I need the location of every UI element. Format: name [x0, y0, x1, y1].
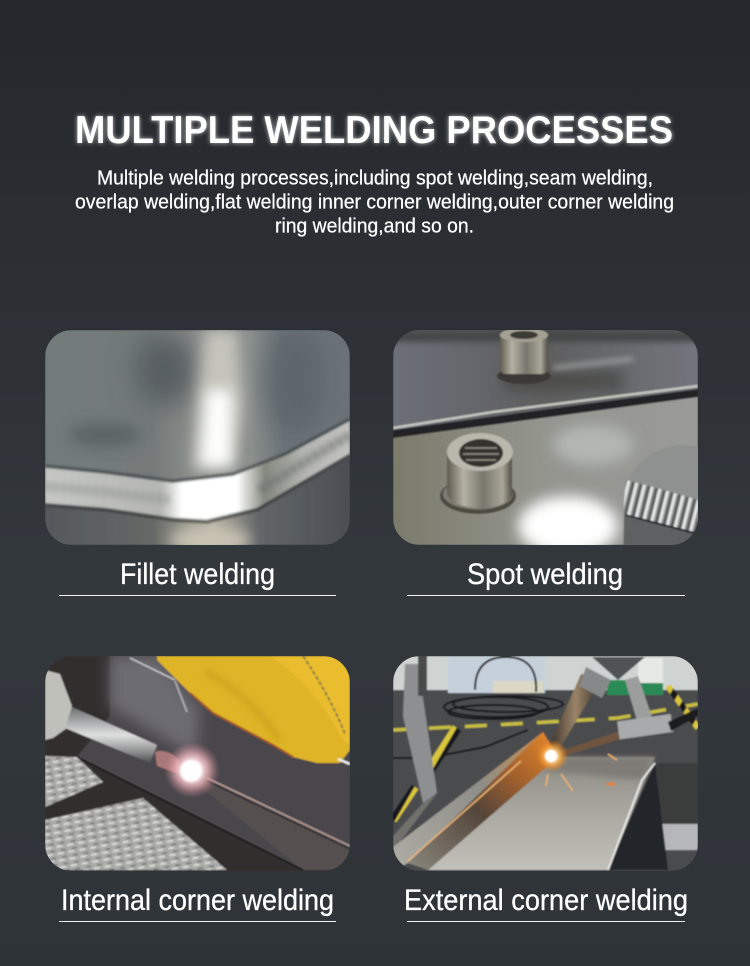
cables [393, 657, 563, 758]
caption: internal corner welding: Internal corner welding [61, 884, 334, 917]
caption: spot welding: Spot welding [467, 558, 623, 591]
caption: fillet welding: Fillet welding [120, 558, 275, 591]
plate edge [393, 389, 698, 438]
concrete table [45, 756, 103, 807]
weld seam [45, 420, 350, 520]
sparks [536, 740, 617, 791]
steel sheet [77, 656, 350, 870]
panel: fillet welding photo [45, 325, 350, 554]
upper plate [393, 330, 698, 440]
title: MULTIPLE WELDING PROCESSES [75, 109, 673, 152]
title: MULTIPLE WELDING PROCESSES [75, 109, 673, 152]
intro text: ring welding,and so on. [275, 214, 474, 238]
torch and wire [550, 674, 592, 747]
panel: internal corner welding photo [45, 656, 350, 871]
lower plate [393, 393, 698, 545]
intro text: overlap welding,flat welding inner corner welding,outer corner welding [75, 190, 674, 214]
panel: spot welding photo [393, 330, 698, 545]
caption: external corner welding: External corner welding [404, 884, 688, 917]
intro text [75, 166, 674, 238]
upper nut [496, 372, 551, 384]
steel box [428, 757, 655, 870]
inset weld detail [622, 446, 698, 545]
lower nut [440, 486, 516, 514]
weld flash [164, 742, 220, 798]
welding head [45, 670, 72, 740]
lower surface [45, 452, 350, 545]
yellow glove [157, 656, 350, 763]
workshop floor [393, 689, 698, 871]
dark right table [655, 763, 698, 824]
machine frame [403, 664, 437, 803]
intro text: Multiple welding processes,including spot welding,seam welding, [97, 166, 653, 190]
yellow tape [393, 704, 698, 730]
panel: external corner welding photo [393, 656, 698, 871]
